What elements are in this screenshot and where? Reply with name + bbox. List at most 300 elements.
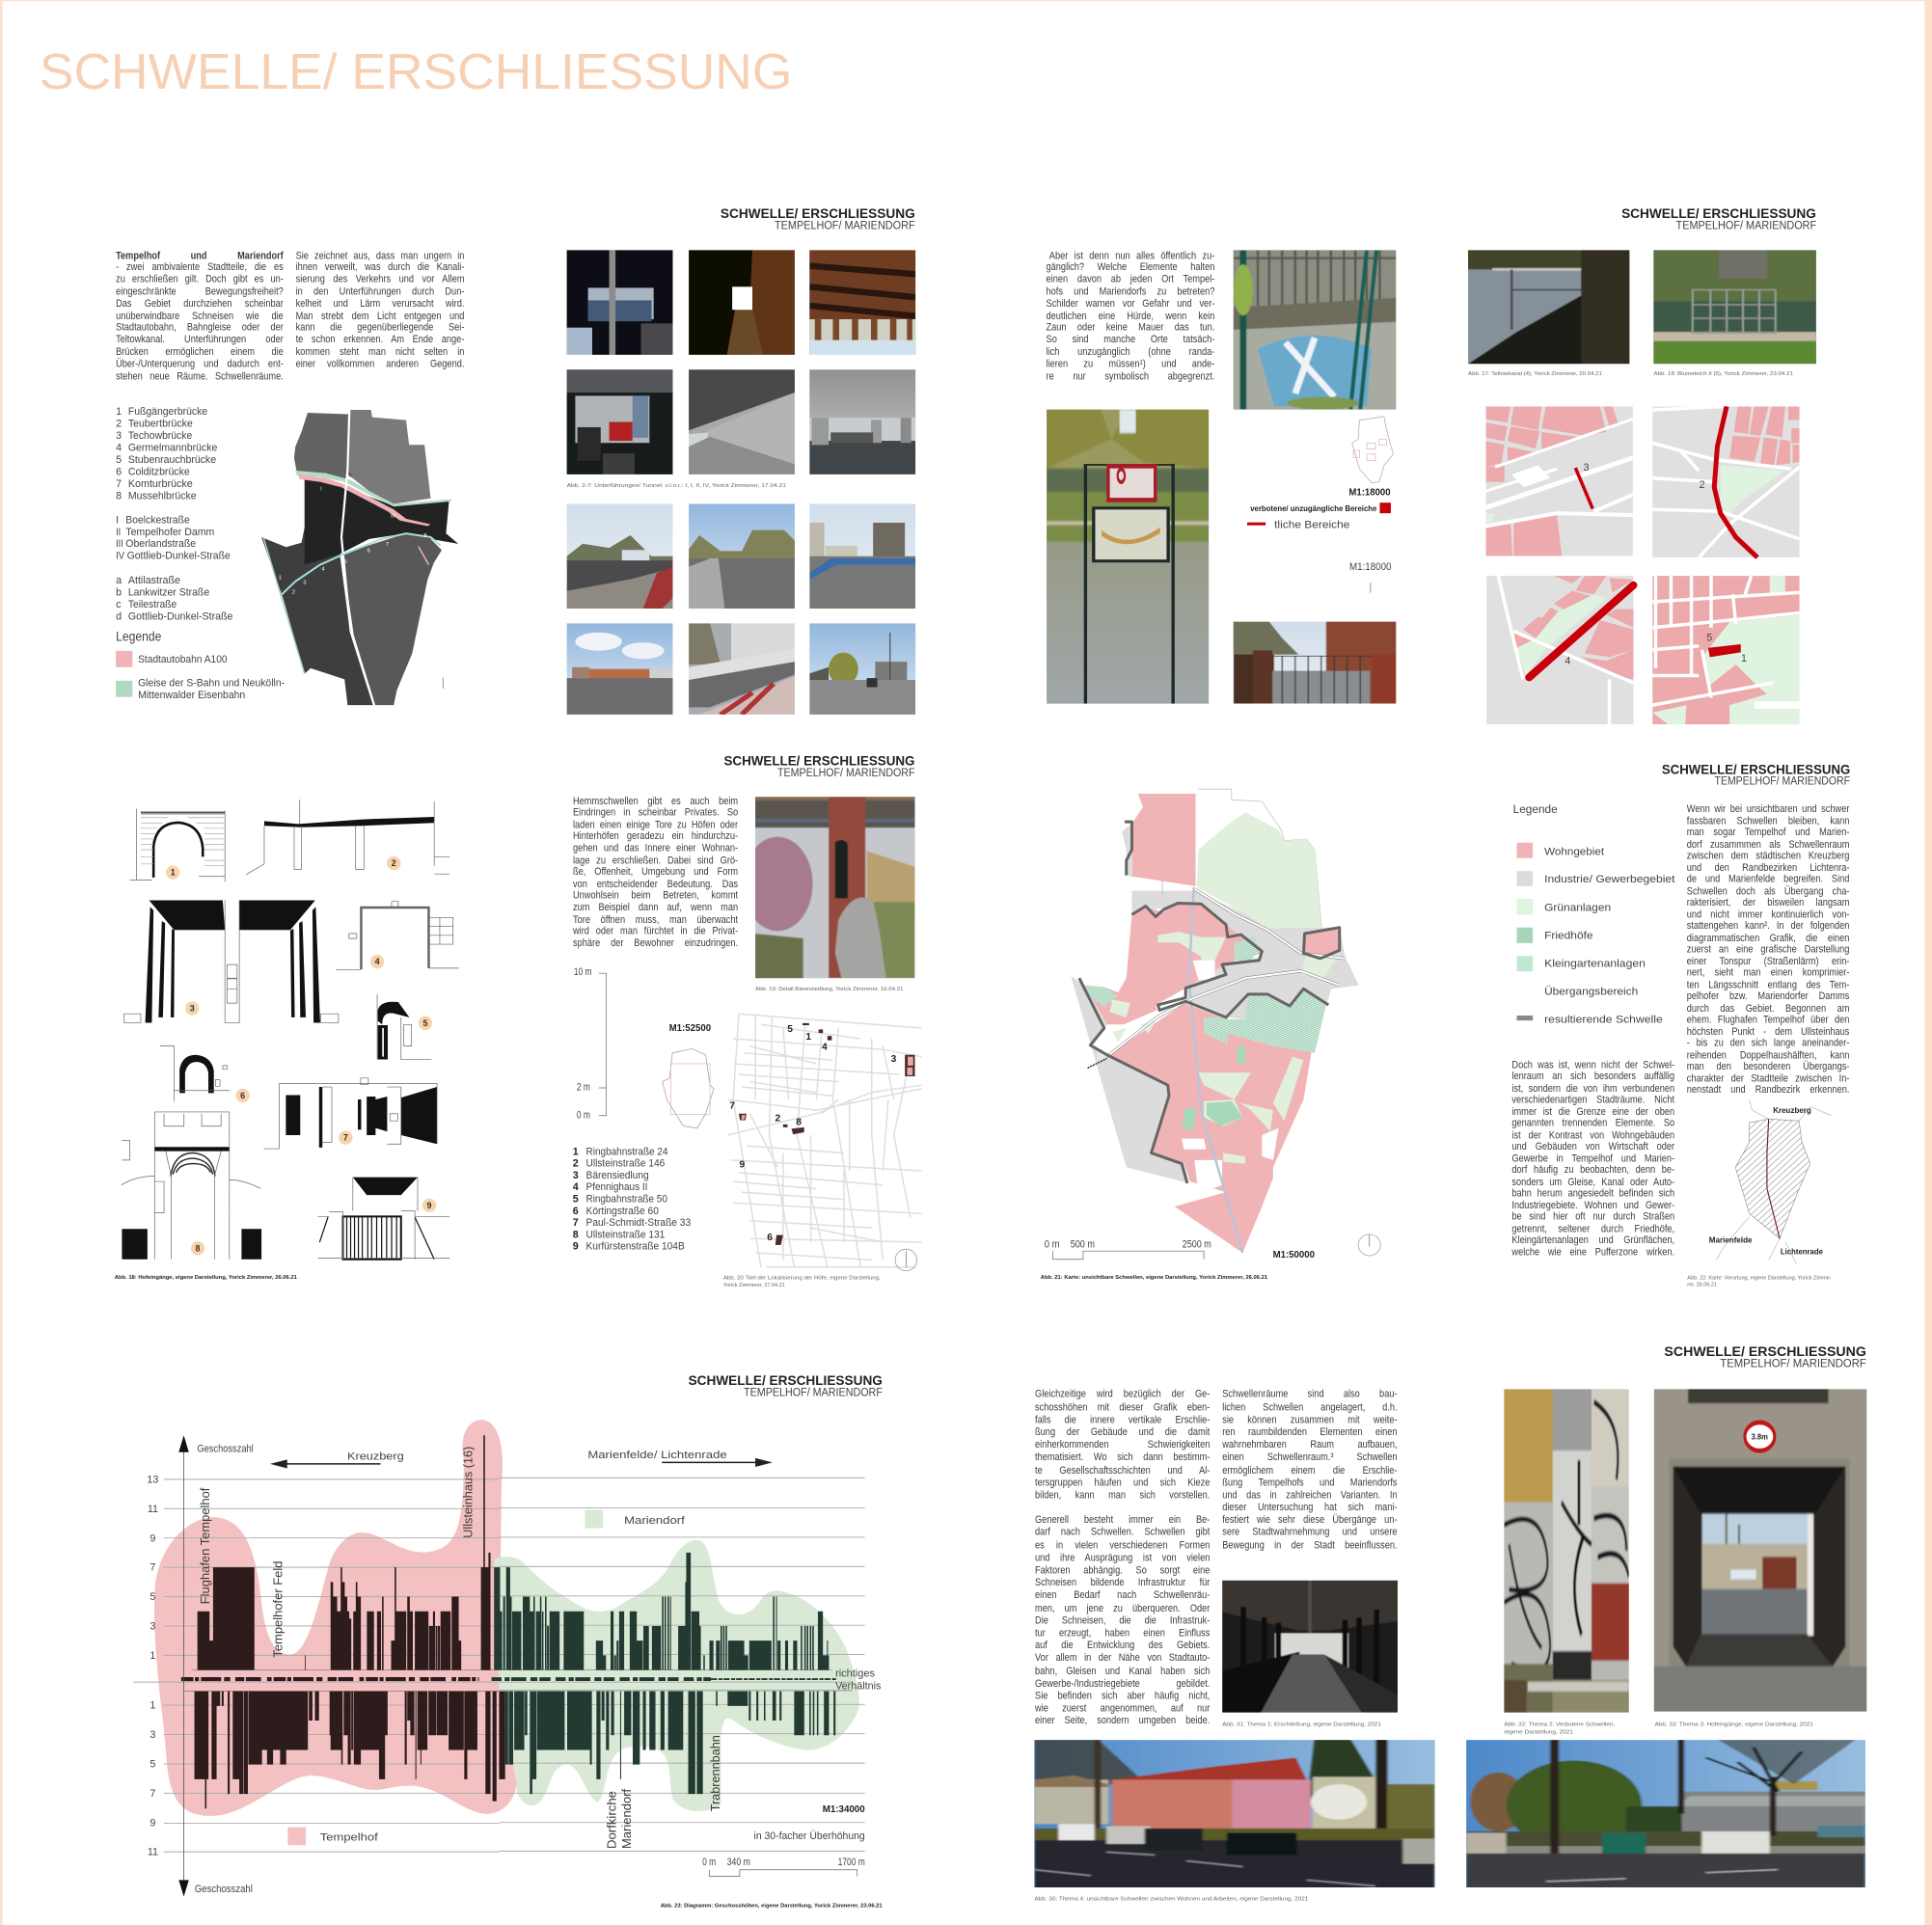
number badges: 2 xyxy=(392,858,396,868)
text block: column 1: einherkommenden Schwierigkeiten xyxy=(1034,1438,1210,1451)
chart labels: Geschosszahl xyxy=(195,1884,253,1895)
caption: Abb. 19: Detail Bärensiedlung, Yorick Zimmerer, 16.04.21 xyxy=(755,987,903,992)
photo: road junction with sky xyxy=(567,623,673,715)
text block: intro column 1: zu erschließen gilt. Doch gibt es un- xyxy=(116,273,284,285)
number badges: 1 xyxy=(171,868,176,878)
drawing 8 xyxy=(122,1112,261,1260)
photo: pedestrian underpass xyxy=(1222,1580,1398,1713)
scale label: M1:52500 xyxy=(669,1023,712,1034)
line drawings: courtyard gates xyxy=(122,800,459,1260)
number badges: 7 xyxy=(343,1133,348,1143)
text block: threshold space: ehem. Flughafen Tempelhof über den xyxy=(1687,1013,1850,1025)
map: study area dark xyxy=(261,410,458,705)
text block: threshold space: de und Marienfelde begreifen. Sind xyxy=(1687,873,1850,884)
list: bridges: Mussehlbrücke xyxy=(128,490,197,502)
text block: inhibition thresholds: ße, Offenheit, Umgebung und Form xyxy=(573,865,738,878)
scale labels: 2500 m xyxy=(1183,1239,1211,1251)
text block: threshold space: man den besonderen Übergangs- xyxy=(1687,1060,1850,1072)
axis numbers: 5 xyxy=(150,1758,155,1770)
map numbers: III xyxy=(391,514,395,520)
photo: gate and brick building xyxy=(1233,621,1397,704)
legend: Stadtautobahn A100 xyxy=(138,654,228,665)
list: courtyards: 6 xyxy=(573,1206,579,1217)
map numbers: 6 xyxy=(367,548,370,554)
header xyxy=(689,1372,883,1398)
text block: intro column 1 xyxy=(116,250,284,385)
list: courtyards: 5 xyxy=(573,1194,579,1206)
text block: access: deutlichen eine Hürde, wenn kein xyxy=(1047,309,1214,321)
list: bridges: Colditzbrücke xyxy=(128,466,190,477)
text block: inhibition thresholds xyxy=(573,796,738,953)
photo: road with red cycle lane xyxy=(567,503,673,609)
text block: threshold space xyxy=(1687,803,1850,1098)
text block: column 1: Die Schneisen, die die Infrastruk- xyxy=(1034,1613,1210,1626)
text block: column 1: Gleichzeitige wird bezüglich der Ge- xyxy=(1034,1388,1210,1400)
axis numbers: 11 xyxy=(148,1504,158,1515)
legend: land use: resultierende Schwelle xyxy=(1544,1015,1663,1026)
map labels: 4 xyxy=(1565,656,1570,667)
map numbers: 7 xyxy=(386,542,389,548)
map: courtyard locations xyxy=(663,1014,921,1267)
photo: bridge beams xyxy=(809,250,916,355)
text block: intro column 1: stehen neue Räume. Schwellenräume. xyxy=(116,369,284,381)
map numbers: 1 xyxy=(279,575,282,581)
photo: Bärensiedlung sculpture xyxy=(755,797,914,978)
text block: inhibition thresholds: Unwohlsein beim Betreten, kommt xyxy=(573,888,738,901)
drawing 2 xyxy=(246,800,449,875)
legend: Gleise der S-Bahn und Neukölln- xyxy=(138,678,285,690)
text block: intro column 2: sierung des Verkehrs und vor Allem xyxy=(296,273,464,285)
text block: intro column 1: Stadtautobahn, Bahngleise oder der xyxy=(116,321,284,333)
photo: tunnel traffic xyxy=(567,250,673,355)
legend swatches xyxy=(585,1509,603,1528)
text block: threshold space: Schwellen doch als Übergang cha- xyxy=(1687,884,1850,896)
text block: column 1: ßung der Gebäude und die damit xyxy=(1034,1425,1210,1438)
text block: contrast: welche wie eine Pufferzone wirken. xyxy=(1512,1245,1675,1258)
map: longitudinal section location: Lichtenrade xyxy=(1781,1247,1823,1256)
photo: elevated road pillars xyxy=(809,369,916,474)
vertical labels: Flughafen Tempelhof xyxy=(198,1487,212,1604)
text block: column 2: dieser Untersuchung hat sich mani- xyxy=(1222,1501,1398,1513)
header xyxy=(1621,205,1816,232)
caption xyxy=(1687,1276,1832,1288)
captions: Abb. 17: Teltowkanal (4), Yorick Zimmerer, 20.04.21 xyxy=(1468,371,1602,377)
text block: column 1: Generell besteht immer ein Be- xyxy=(1034,1513,1210,1526)
list: streets xyxy=(116,514,231,562)
list: bridges: 3 xyxy=(116,430,122,442)
list: streets: IV xyxy=(116,551,125,562)
text block: intro column 1: unüberwindbare Schneisen wie die xyxy=(116,309,284,321)
text block: column 1: falls die innere vertikale Erschlie- xyxy=(1034,1413,1210,1425)
text block: intro column 2: te schon erkennen. Am Ende ange- xyxy=(296,333,464,345)
map labels: 5 xyxy=(1706,632,1712,643)
list: courtyards xyxy=(573,1146,691,1253)
scale label: M1:18000 xyxy=(1349,561,1391,573)
map numbers: 1 xyxy=(805,1032,811,1043)
text block: column 2: festiert wie sehr diese Übergänge un- xyxy=(1222,1513,1398,1526)
text block: intro column 1: eingeschränkte Bewegungsfreiheit? xyxy=(116,285,284,297)
text block: inhibition thresholds: gehen und das Innere einer Wohnan- xyxy=(573,841,738,854)
vertical labels: Tempelhofer Feld xyxy=(271,1561,286,1658)
list: bridges: Techowbrücke xyxy=(128,430,192,442)
header: SCHWELLE/ ERSCHLIESSUNG xyxy=(689,1372,883,1388)
header: TEMPELHOF/ MARIENDORF xyxy=(1676,219,1816,232)
map numbers: 9 xyxy=(739,1159,745,1170)
list: bridges: Stubenrauchbrücke xyxy=(128,454,216,466)
text block: intro column 1: Brücken ermöglichen einem die xyxy=(116,345,284,357)
caption: Abb. 31: Thema 1: Erschließung, eigene Darstellung, 2021 xyxy=(1222,1722,1381,1728)
text block: intro column 2: in den Unterführungen durch Dun- xyxy=(296,285,464,297)
text block: intro column 1: - zwei ambivalente Stadtteile, die es xyxy=(116,260,284,273)
text block: access: Zaun oder keine Mauer das tun. xyxy=(1047,321,1214,333)
captions xyxy=(1504,1722,1813,1735)
list: courtyards: 4 xyxy=(573,1181,579,1193)
text block: threshold space: reihenden Doppelhaushälften, kann xyxy=(1687,1048,1850,1061)
panel: barriers and forbidden areas xyxy=(1039,205,1824,724)
photo: canal barrier xyxy=(1468,250,1630,365)
text block: column 1: auf die Entwicklung des Gebiets. xyxy=(1034,1639,1210,1651)
legend: forbidden areas: verbotene/ unzugängliche Bereiche xyxy=(1250,503,1377,513)
legend: Legende xyxy=(116,629,161,643)
map: longitudinal section location: Marienfelde xyxy=(1709,1235,1753,1244)
chart labels xyxy=(195,1443,881,1895)
arrow: to Kreuzberg xyxy=(270,1459,381,1468)
list: courtyards: 3 xyxy=(573,1170,579,1181)
panel: courtyard entrances drawings xyxy=(115,800,459,1281)
text block: inhibition thresholds: sphäre der Bewohner einzudringen. xyxy=(573,935,738,948)
list: bridges: Teubertbrücke xyxy=(128,418,193,429)
chart labels: in 30-facher Überhöhung xyxy=(754,1830,865,1842)
captions: Abb. 18: Blumeteich II (5), Yorick Zimmerer, 23.04.21 xyxy=(1654,371,1793,377)
captions: Abb. 32: Thema 2: Verbotene Schwellen, xyxy=(1504,1722,1616,1728)
map numbers: 7 xyxy=(729,1100,735,1111)
panel: land use legend and text xyxy=(1512,761,1850,1288)
scale labels xyxy=(1045,1239,1315,1261)
text block: column 2: ren raumbildenden Elementen einen xyxy=(1222,1425,1398,1438)
legend: forbidden areas: tliche Bereiche xyxy=(1274,519,1349,530)
text block: contrast: Industriegebiete. Wohnen und Gewer- xyxy=(1512,1198,1675,1210)
list: streets: II xyxy=(116,527,121,538)
legend: forbidden areas xyxy=(1247,502,1391,530)
chart labels: 1700 m xyxy=(838,1857,865,1868)
map labels: 1 xyxy=(1741,653,1747,664)
header: SCHWELLE/ ERSCHLIESSUNG xyxy=(1621,205,1816,221)
list: roads: Lankwitzer Straße xyxy=(128,586,209,598)
number badges: 5 xyxy=(422,1018,427,1028)
list: roads xyxy=(116,575,232,622)
text block: threshold space: zuerst an eine grafische Darstellung xyxy=(1687,942,1850,955)
text block: threshold space: charakter der Stadtteile zwischen In- xyxy=(1687,1071,1850,1084)
list: streets: Tempelhofer Damm xyxy=(125,527,214,538)
list: courtyards: Ullsteinstraße 146 xyxy=(586,1158,665,1170)
text block: contrast: Kleingärtenanlagen und Grünflächen, xyxy=(1512,1234,1675,1246)
list: roads: Gottlieb-Dunkel-Straße xyxy=(128,610,232,622)
maps: forbidden zones xyxy=(1486,406,1800,724)
map numbers: 5 xyxy=(787,1024,793,1035)
text block: contrast: ist, sondern die von ihm verbundenen xyxy=(1512,1082,1675,1094)
text block: threshold space: höchsten Punkt - dem Ullsteinhaus xyxy=(1687,1025,1850,1037)
photo: bridge with barriers xyxy=(689,623,795,715)
list: bridges: 2 xyxy=(116,418,122,429)
scale labels: 500 m xyxy=(1071,1239,1095,1251)
axis numbers: 3 xyxy=(150,1621,155,1633)
list: roads: b xyxy=(116,586,122,598)
text block: column 2: Bewegung in der Stadt beeinflussen. xyxy=(1222,1538,1398,1551)
text block: inhibition thresholds: laden einen einige Tore zu Höfen oder xyxy=(573,818,738,830)
caption: Abb. 30: Thema 4: unsichtbare Schwellen zwischen Wohnen und Arbeiten, eigene Darstellung, 2021 xyxy=(1034,1896,1308,1902)
text block: threshold space: einer Tonspur (Straßenlärm) erin- xyxy=(1687,955,1850,966)
text block: threshold space: fassbaren Schwellen bleiben, kann xyxy=(1687,814,1850,827)
axis numbers: 11 xyxy=(148,1847,158,1858)
text block: contrast: ist der Kontrast von Wohngebäuden xyxy=(1512,1128,1675,1141)
panel: courtyard localisation xyxy=(573,753,923,1288)
map labels xyxy=(1565,462,1747,667)
number badges: 4 xyxy=(375,957,380,966)
chart labels: 0 m xyxy=(702,1857,716,1868)
panel: building heights diagram xyxy=(133,1372,883,1909)
text block: contrast: be sind hier oft nur durch Straßen xyxy=(1512,1210,1675,1222)
text block: column 1: te Gesellschaftsschichten und Al- xyxy=(1034,1463,1210,1476)
text block: intro column 2: kann die gegenüberliegende Sei- xyxy=(296,321,464,333)
map labels: 2 xyxy=(1700,479,1705,491)
text block: column 1: tur erzeugt, haben einen Einfluss xyxy=(1034,1626,1210,1639)
caption: Yorick Zimmerer, 27.04.21 xyxy=(723,1283,785,1288)
scale labels: 0 m xyxy=(1045,1239,1060,1251)
header xyxy=(1664,1343,1866,1370)
text block: threshold space: stattengehen kann². In der folgenden xyxy=(1687,919,1850,932)
scale bar xyxy=(709,1870,857,1877)
text block: contrast: verschiedenartigen Stadträume. Nicht xyxy=(1512,1094,1675,1105)
axis numbers: 9 xyxy=(150,1817,155,1829)
caption: Abb. 18: Hofeingänge, eigene Darstellung, Yorick Zimmerer, 26.06.21 xyxy=(115,1275,298,1281)
map numbers xyxy=(729,1024,897,1243)
list: roads: c xyxy=(116,599,122,610)
list: roads: d xyxy=(116,610,122,622)
captions xyxy=(1468,371,1793,377)
text block: access: lich unzugänglich (ohne randa- xyxy=(1047,345,1214,357)
map numbers xyxy=(279,473,427,596)
map numbers: 4 xyxy=(822,1042,828,1052)
map numbers: 5 xyxy=(343,559,347,565)
text block: column 1 xyxy=(1034,1388,1210,1733)
chart: section of storey heights xyxy=(133,1420,865,1897)
text block: threshold space: durch das Gebiet. Begonnen am xyxy=(1687,1001,1850,1014)
area: Tempelhof xyxy=(154,1420,517,1816)
list: bridges: 5 xyxy=(116,454,122,466)
caption xyxy=(723,1276,881,1288)
height scale: 0 m xyxy=(577,1109,590,1121)
map D xyxy=(1652,576,1800,724)
text block: column 2: und das in zahlreichen Varianten. In xyxy=(1222,1488,1398,1501)
text block: column 1: men, um jene zu überqueren. Oder xyxy=(1034,1601,1210,1613)
text block: intro column 2: Man strebt dem Licht entgegen und xyxy=(296,309,464,321)
text block: access: Schilder warnen vor Gefahr und ver- xyxy=(1047,297,1214,309)
map B xyxy=(1652,406,1800,557)
map: longitudinal section location xyxy=(1709,1099,1832,1263)
drawing 3 xyxy=(124,901,339,1022)
text block: threshold space: - bis zu den sich lange aneinander- xyxy=(1687,1037,1850,1048)
text block: column 1: Vor allem in der Nähe von Stadtauto- xyxy=(1034,1651,1210,1664)
text block: contrast: dorf häufig zu beobachten, denn be- xyxy=(1512,1163,1675,1176)
list: courtyards: 7 xyxy=(573,1217,579,1229)
drawing 1 xyxy=(129,808,225,881)
map numbers: 2 xyxy=(775,1113,780,1124)
header: SCHWELLE/ ERSCHLIESSUNG xyxy=(1662,761,1850,776)
height scale: 2 m xyxy=(577,1081,590,1093)
map numbers: II xyxy=(349,473,352,478)
text block: column 1: thematisiert. Wo sich dann bestimm- xyxy=(1034,1451,1210,1463)
panel: introduction and photo grid xyxy=(116,205,921,719)
captions: Abb. 33: Thema 3: Hofeingänge, eigene Darstellung, 2021 xyxy=(1655,1722,1813,1728)
bars: Tempelhof xyxy=(198,1435,491,1670)
text block: threshold space: ten Längsschnitt entlang des Tem- xyxy=(1687,978,1850,990)
text block: threshold space: dorf zusammmen als Schwellenraum xyxy=(1687,837,1850,850)
text block: column 1: und ihre Ausprägung ist von vielen xyxy=(1034,1551,1210,1563)
text block: access: re nur symbolisch abgegrenzt. xyxy=(1047,369,1214,381)
text block: intro column 1: Das Gebiet durchziehen scheinbar xyxy=(116,297,284,309)
photo: pink houses on street xyxy=(1034,1740,1435,1887)
list: roads: Teilestraße xyxy=(128,599,177,610)
text block: column 1: wie zuerst angenommen, auf nur xyxy=(1034,1701,1210,1714)
list: courtyards: Bärensiedlung xyxy=(586,1170,649,1181)
map numbers: 3 xyxy=(303,581,307,586)
text block: contrast: und Gebäuden von Wirtschaft oder xyxy=(1512,1140,1675,1152)
number badges: 3 xyxy=(190,1004,195,1014)
text block: inhibition thresholds: Tore öffnen muss, man überwacht xyxy=(573,912,738,925)
map numbers: 6 xyxy=(767,1233,773,1243)
photo: graffiti wall xyxy=(1504,1389,1629,1713)
arrow: to Marienfelde xyxy=(662,1458,773,1467)
photo: dark tunnel xyxy=(689,250,795,355)
text block: threshold space: man sogar Tempelhof und Marien- xyxy=(1687,826,1850,838)
text block: column 1: bahn, Gleisen und Kanal haben sich xyxy=(1034,1664,1210,1676)
text block: access xyxy=(1047,250,1215,385)
list: bridges xyxy=(116,406,217,502)
axis numbers: 5 xyxy=(150,1591,155,1603)
text block: inhibition thresholds: zum Beispiel dann auf, wenn man xyxy=(573,901,738,913)
list: bridges: Komturbrücke xyxy=(128,478,193,490)
list: courtyards: Ringbahnstraße 24 xyxy=(586,1146,668,1157)
list: streets: Oberlandstraße xyxy=(125,538,196,550)
number badges: 6 xyxy=(240,1091,245,1100)
text block: access: So sind manche Orte tatsäch- xyxy=(1047,333,1214,345)
legend xyxy=(116,629,285,701)
text block: contrast: lenraum an sich besonders auffällig xyxy=(1512,1070,1675,1082)
number badges: 8 xyxy=(196,1243,201,1253)
list: bridges: Germelmannbrücke xyxy=(128,442,217,453)
drawing 6 xyxy=(160,1045,230,1101)
text block: column 2: wahrnehmbaren Raum aufbauen, xyxy=(1222,1438,1398,1451)
scale labels: M1:50000 xyxy=(1273,1250,1315,1261)
map C xyxy=(1486,576,1633,724)
list: roads: a xyxy=(116,575,122,586)
inset: key map outline xyxy=(1352,417,1394,483)
map A xyxy=(1486,406,1633,556)
photo: concrete underpass xyxy=(689,369,795,474)
photo: courtyard gate with height sign xyxy=(1653,1389,1867,1712)
text block: threshold space: nenstadt und Randbezirk erkennen. xyxy=(1687,1083,1850,1096)
bars: Mariendorf xyxy=(494,1553,829,1670)
text block: inhibition thresholds: wird oder man fürchtet in die Privat- xyxy=(573,924,738,936)
height scale xyxy=(574,966,606,1121)
map numbers: I xyxy=(320,486,322,492)
list: courtyards: Pfennighaus II xyxy=(586,1181,647,1193)
axis numbers xyxy=(147,1475,158,1858)
photo: bridge road and trees xyxy=(689,503,795,609)
text block: contrast: immer ist die Grenze eine der oben xyxy=(1512,1105,1675,1117)
list: bridges: Fußgängerbrücke xyxy=(128,406,207,418)
vertical labels xyxy=(198,1447,722,1849)
text block: column 1: tersgruppen häufen und sich Kieze xyxy=(1034,1476,1210,1488)
chart labels: Marienfelde/ Lichtenrade xyxy=(587,1450,727,1461)
text block: threshold space: und den Randbezirken Lichtenra- xyxy=(1687,860,1850,873)
photo: parking and store xyxy=(1466,1740,1865,1887)
chart labels: Mariendorf xyxy=(624,1515,685,1527)
legend: land use: Wohngebiet xyxy=(1544,846,1604,857)
drawing 4 xyxy=(336,902,459,970)
header: SCHWELLE/ ERSCHLIESSUNG xyxy=(721,205,915,221)
text block: access: hofs und Mariendorfs zu betreten? xyxy=(1047,285,1214,297)
text block: column 2: lichen Schwellen angelagert, d.h. xyxy=(1222,1400,1398,1413)
text block: column 1: es in vielen verschiedenen Formen xyxy=(1034,1538,1210,1551)
axis numbers: 7 xyxy=(150,1788,155,1800)
text block: intro column 1: Über-/Unterquerung und dadurch ent- xyxy=(116,357,284,369)
photo: underpass with red car xyxy=(567,369,673,474)
text block: intro column 2: einer vollkommen anderen Gegend. xyxy=(296,357,464,369)
text block: access: gänglich? Welche Elemente halten xyxy=(1047,260,1214,273)
caption: Abb. 23: Diagramm: Geschosshöhen, eigene Darstellung, Yorick Zimmerer, 23.06.21 xyxy=(661,1903,883,1909)
list: bridges: 7 xyxy=(116,478,122,490)
text block: intro column 2: kommen steht man nicht selten in xyxy=(296,345,464,357)
photo: fence with graffiti xyxy=(1233,250,1397,410)
list: courtyards: 2 xyxy=(573,1158,579,1170)
chart labels: Geschosszahl xyxy=(197,1443,254,1454)
text block: intro column 2 xyxy=(296,250,465,373)
header: SCHWELLE/ ERSCHLIESSUNG xyxy=(1664,1343,1866,1359)
list: streets: III xyxy=(116,538,123,550)
text block: threshold space: und nicht immer kontinuierlich von- xyxy=(1687,908,1850,920)
axis numbers: 7 xyxy=(150,1562,155,1574)
vertical labels: Mariendorf xyxy=(619,1788,634,1849)
axis numbers: 1 xyxy=(150,1650,155,1662)
main title: SCHWELLE/ ERSCHLIESSUNG xyxy=(40,44,792,100)
number badges: 9 xyxy=(427,1201,432,1210)
photo grid: tunnels and bridges xyxy=(561,245,921,719)
caption: Abb. 20 Titel der Lokalisierung der Höfe, eigene Darstellung, xyxy=(723,1276,881,1282)
photo: road with willow xyxy=(809,623,916,715)
header: TEMPELHOF/ MARIENDORF xyxy=(775,219,915,232)
caption: Abb. 2-7: Unterführungen/ Tunnel: v.l.n.r.: I, I, II, IV, Yorick Zimmerer, 17.04.21 xyxy=(567,483,786,489)
header: TEMPELHOF/ MARIENDORF xyxy=(1715,774,1850,788)
drawing 5 xyxy=(377,994,431,1060)
list: courtyards: Ullsteinstraße 131 xyxy=(586,1229,665,1240)
map numbers: 8 xyxy=(796,1118,802,1128)
legend: land use: Übergangsbereich xyxy=(1544,986,1638,997)
text block: inhibition thresholds: von entscheidender Bedeutung. Das xyxy=(573,877,738,889)
text block: intro column 1: Teltowkanal. Unterführungen oder xyxy=(116,333,284,345)
list: streets: I xyxy=(116,514,119,526)
axis numbers: 13 xyxy=(147,1475,158,1486)
text block: column 2: sere Stadtwahrnehmung und unsere xyxy=(1222,1526,1398,1538)
legend: land use: Kleingartenanlagen xyxy=(1544,959,1646,970)
legend: land use: Legende xyxy=(1513,802,1558,816)
text block: column 2: sie können zusammen mit weite- xyxy=(1222,1413,1398,1425)
photo: bridge road and buildings xyxy=(809,503,916,609)
sign label: 3.8m xyxy=(1752,1432,1768,1442)
chart labels: M1:34000 xyxy=(823,1804,865,1815)
axis xyxy=(178,1435,189,1897)
text block: threshold space: nert, sieht man einen komprimier- xyxy=(1687,966,1850,979)
